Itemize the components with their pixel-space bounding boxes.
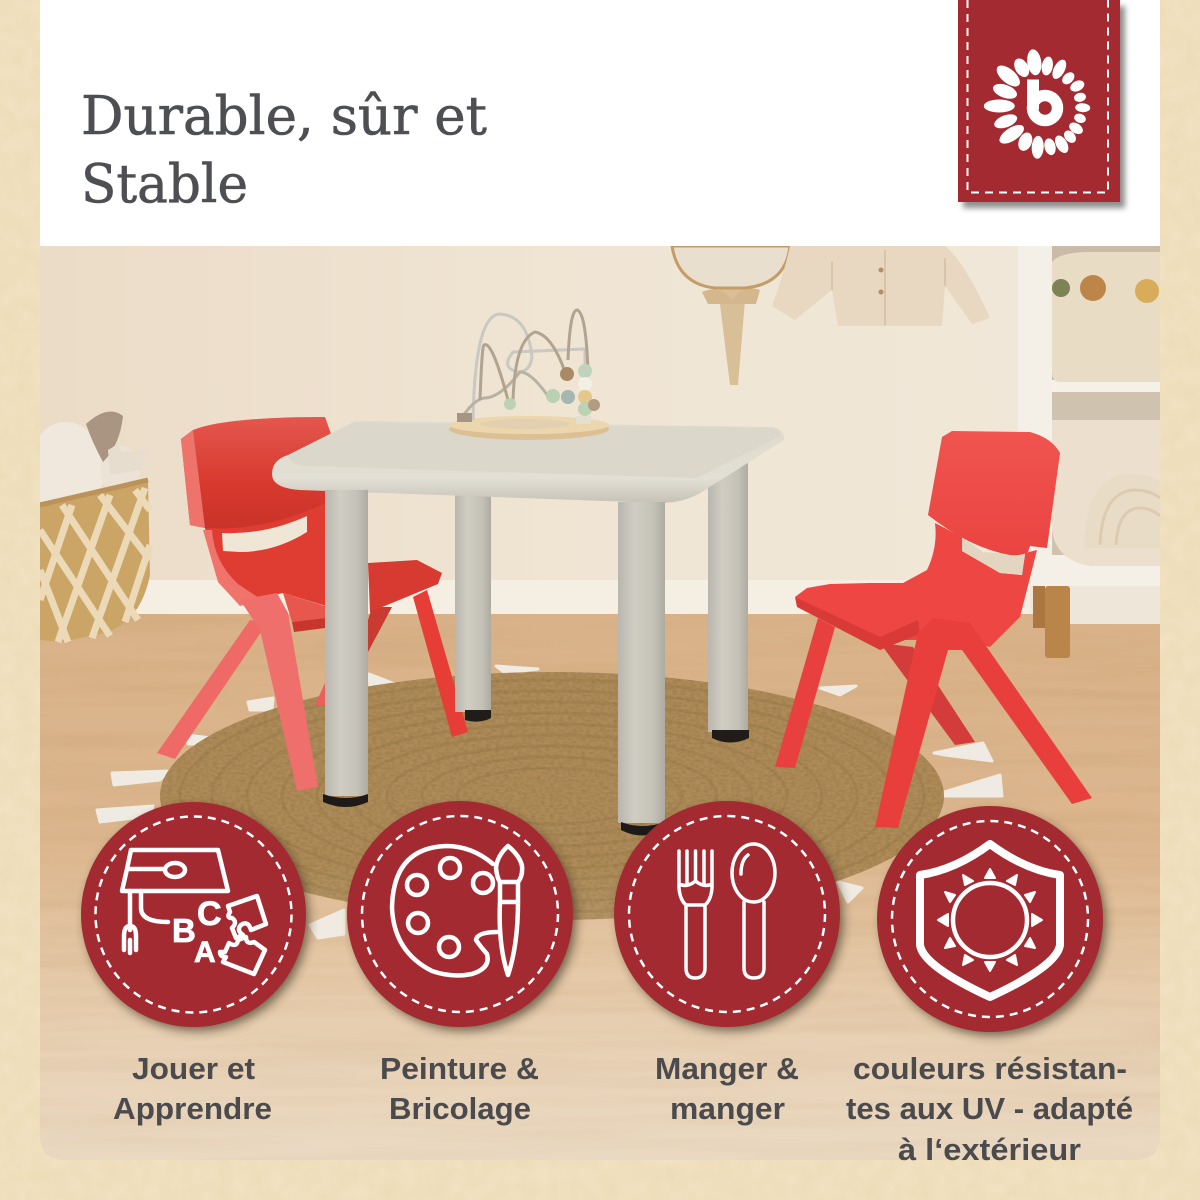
caption: manger: Manger & — [655, 1051, 799, 1086]
fade overlay at bottom — [40, 896, 1160, 1160]
caption: couleurs resistantes — [846, 1056, 1132, 1160]
icon: graduation cap, letters and puzzle: B — [172, 912, 196, 949]
caption: peinture et bricolage: Peinture & — [380, 1051, 539, 1086]
caption: peinture et bricolage: Bricolage — [389, 1091, 531, 1126]
caption: couleurs resistantes: à l‘extérieur — [898, 1132, 1081, 1167]
table — [272, 421, 784, 836]
wall — [40, 246, 1070, 614]
caption: jouer et apprendre — [114, 1058, 271, 1126]
left red chair — [157, 417, 468, 791]
logo ribbon — [958, 0, 1125, 208]
caption: jouer et apprendre: Apprendre — [113, 1091, 272, 1126]
hanging bag and strap — [672, 246, 790, 385]
badge: jouer et apprendre — [81, 802, 309, 1031]
title — [81, 86, 487, 215]
fabric basket with rainbow — [1052, 420, 1160, 566]
title: Durable, sûr et — [81, 86, 487, 147]
icon: fork and spoon — [679, 844, 775, 978]
tassels around rug — [97, 666, 1002, 938]
badge: manger — [614, 801, 843, 1031]
icon: shield with sun — [920, 844, 1060, 997]
icon: graduation cap, letters and puzzle: A — [194, 936, 216, 969]
caption: peinture et bricolage — [382, 1057, 538, 1126]
right red chair — [775, 431, 1092, 828]
baseboard — [136, 580, 1030, 614]
front legs — [323, 490, 665, 836]
shelf unit — [1018, 246, 1160, 658]
title: Stable — [81, 154, 248, 215]
caption: manger — [657, 1058, 798, 1126]
hanging cardigan — [772, 246, 990, 326]
badge: couleurs resistantes aux UV — [877, 806, 1106, 1036]
icon: graduation cap, letters and puzzle — [122, 850, 266, 974]
captions — [114, 1056, 1132, 1160]
plush toys and wicker basket — [28, 412, 150, 642]
woven basket with pompoms — [1052, 252, 1160, 382]
photo: children's table and chairs in a room — [28, 246, 1160, 1160]
icon: palette and brush — [392, 846, 522, 975]
caption: jouer et apprendre: Jouer et — [132, 1051, 255, 1086]
caption: couleurs resistantes: tes aux UV - adapté — [846, 1091, 1133, 1126]
icon: graduation cap, letters and puzzle: C — [197, 895, 222, 933]
back legs — [455, 452, 749, 742]
round jute rug — [97, 660, 1002, 938]
white header band — [40, 0, 1160, 246]
table top — [272, 421, 784, 503]
caption: couleurs resistantes: couleurs résistan- — [853, 1051, 1127, 1086]
logo flower — [984, 48, 1090, 159]
wooden bead maze toy — [449, 310, 609, 440]
badge: peinture et bricolage — [347, 801, 576, 1031]
caption: manger: manger — [670, 1091, 785, 1126]
floor — [40, 614, 1160, 1160]
